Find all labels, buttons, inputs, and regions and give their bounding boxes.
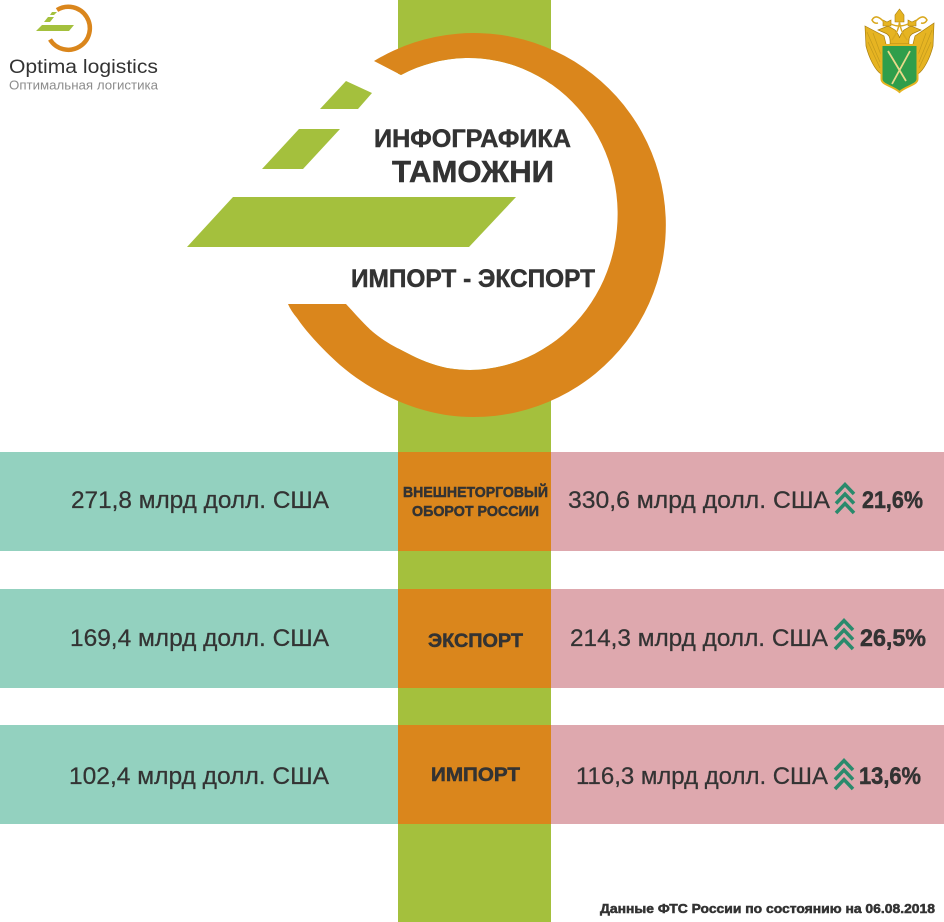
2018 value panel bbox=[551, 589, 944, 688]
2017 value panel bbox=[0, 452, 398, 551]
right value: 214,3 млрд долл. США bbox=[570, 625, 828, 652]
logo ring bbox=[50, 7, 90, 50]
shield bbox=[882, 45, 918, 92]
category panel bbox=[398, 452, 551, 551]
category label: ИМПОРТ bbox=[431, 765, 520, 786]
2018 value panel bbox=[551, 452, 944, 551]
ribbons bbox=[872, 17, 927, 40]
vertical green band bbox=[398, 0, 551, 922]
right wing bbox=[913, 23, 934, 74]
panel: header emblem bbox=[187, 33, 666, 417]
left value: 169,4 млрд долл. США bbox=[70, 625, 329, 652]
white ring interior bbox=[330, 58, 618, 370]
title line 1: ИНФОГРАФИКА bbox=[374, 125, 571, 153]
title line 2: ТАМОЖНИ bbox=[392, 155, 554, 189]
eagle heads bbox=[878, 26, 921, 44]
crossed staffs bbox=[888, 51, 910, 84]
row: export bbox=[0, 589, 944, 688]
row: foreign trade turnover bbox=[0, 452, 944, 551]
green stripe small bbox=[320, 81, 372, 109]
left value: 102,4 млрд долл. США bbox=[69, 763, 329, 790]
subtitle: ИМПОРТ - ЭКСПОРТ bbox=[351, 265, 595, 293]
right value: 330,6 млрд долл. США bbox=[568, 487, 830, 514]
icon: up chevrons bbox=[835, 760, 853, 789]
green stripe large bbox=[187, 197, 516, 247]
left wing feathers bbox=[867, 32, 881, 68]
2017 value panel bbox=[0, 725, 398, 824]
green stripe medium bbox=[262, 129, 340, 169]
logo: Optima logistics bbox=[9, 7, 158, 92]
category panel bbox=[398, 589, 551, 688]
growth percent: 13,6% bbox=[859, 763, 921, 790]
right wing feathers bbox=[918, 30, 932, 68]
category label: ВНЕШНЕТОРГОВЫЙ bbox=[403, 483, 548, 501]
category panel bbox=[398, 725, 551, 824]
2018 value panel bbox=[551, 725, 944, 824]
icon: up chevrons bbox=[835, 620, 853, 649]
category label second line: ОБОРОТ РОССИИ bbox=[412, 503, 539, 520]
2017 value panel bbox=[0, 589, 398, 688]
category label: ЭКСПОРТ bbox=[428, 631, 523, 652]
row: import bbox=[0, 725, 944, 824]
source note: Данные ФТС России по состоянию на 06.08.2018 bbox=[600, 902, 935, 916]
right value: 116,3 млрд долл. США bbox=[576, 763, 828, 790]
icon: up chevrons bbox=[836, 484, 854, 513]
growth percent: 26,5% bbox=[860, 625, 926, 652]
logo name: Optima logistics bbox=[9, 57, 158, 78]
icon: customs service crest bbox=[865, 9, 934, 92]
left value: 271,8 млрд долл. США bbox=[71, 487, 329, 514]
logo stripes bbox=[36, 12, 74, 31]
logo tagline: Оптимальная логистика bbox=[9, 78, 158, 92]
growth percent: 21,6% bbox=[862, 487, 923, 514]
orange ring bbox=[288, 33, 666, 417]
left wing bbox=[865, 26, 886, 74]
crowns bbox=[883, 9, 916, 26]
